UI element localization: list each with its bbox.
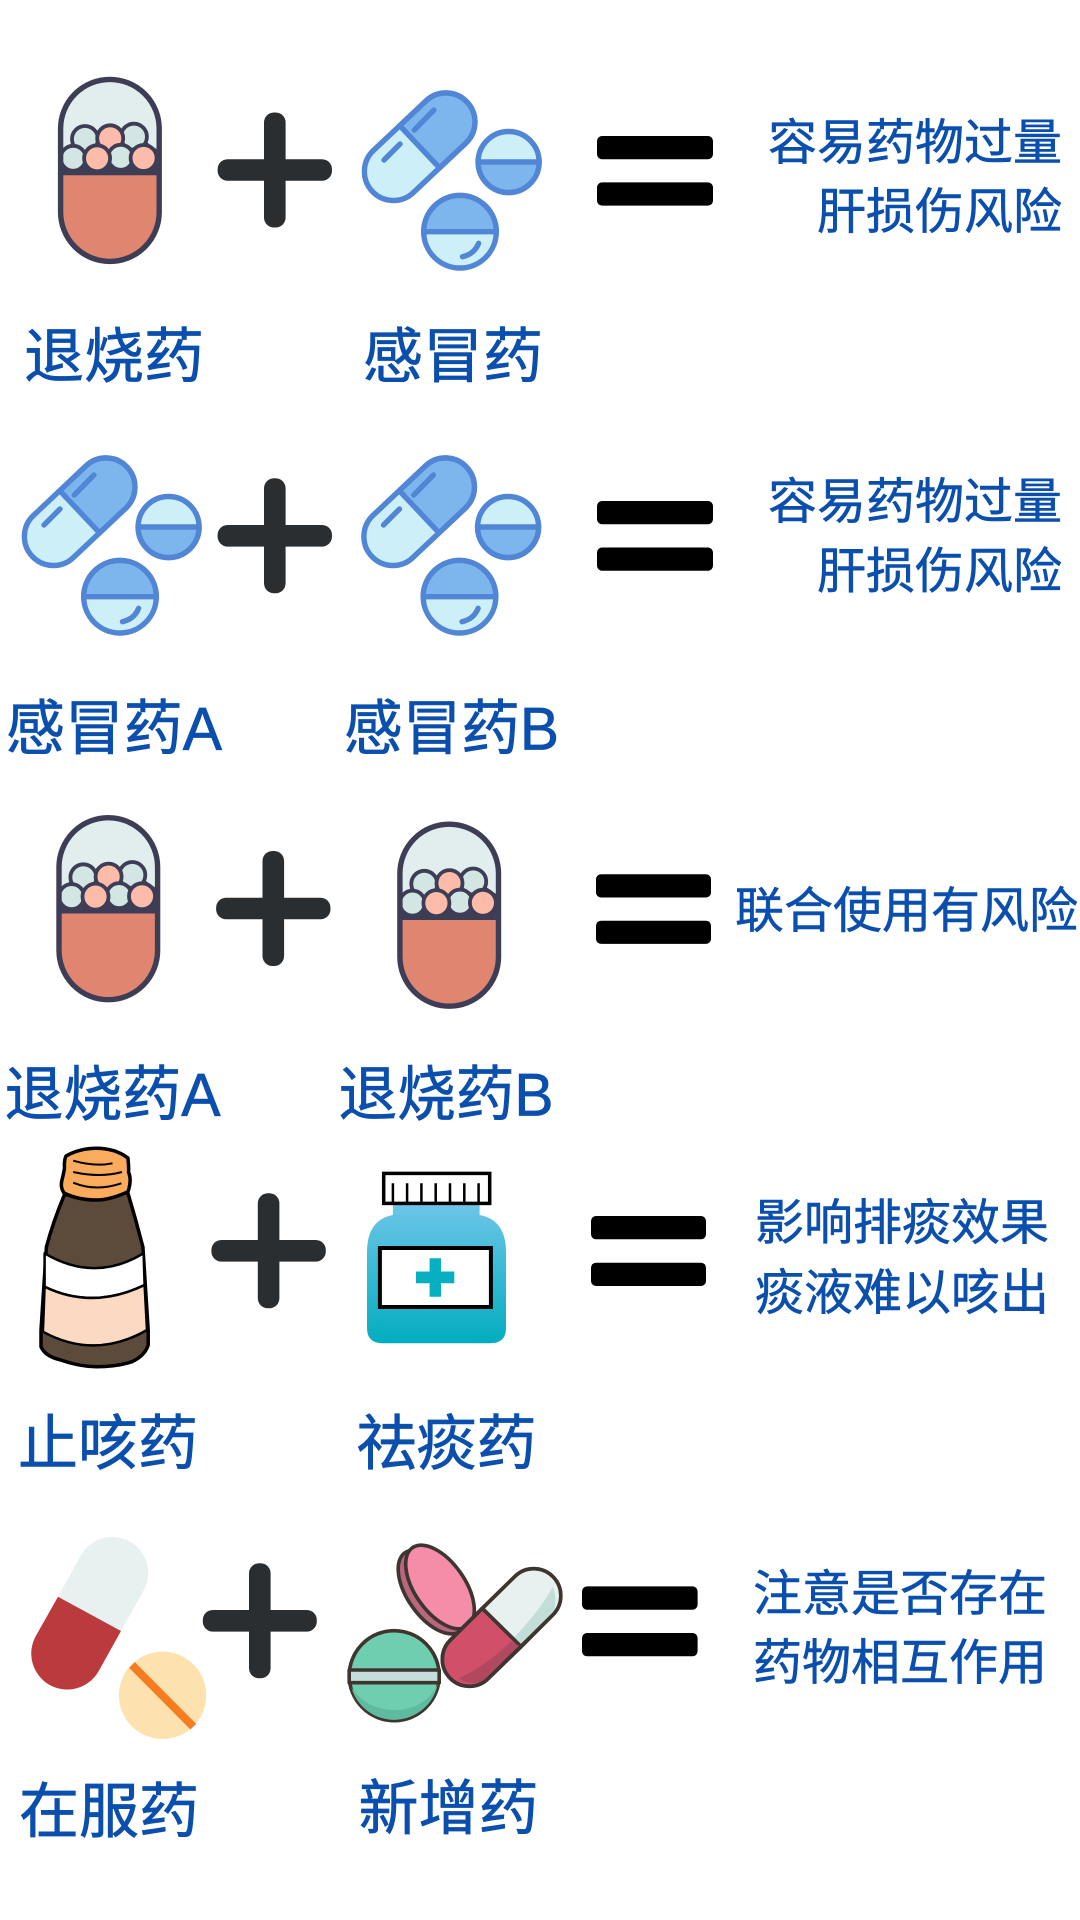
icon: plus: [218, 478, 332, 593]
panel: current medicine plus new medicine: [19, 1533, 1047, 1845]
label: cold medicine B: 感冒药B: [344, 695, 559, 762]
icon: equals: [591, 1216, 706, 1286]
label: cough suppressant: 止咳药: [18, 1410, 198, 1477]
icon: equals: [582, 1586, 698, 1656]
result text: 容易药物过量: [768, 476, 1062, 530]
label: fever medicine: 退烧药: [24, 323, 204, 390]
result text: 肝损伤风险: [817, 186, 1062, 240]
result text: [755, 1197, 1049, 1320]
result text: 药物相互作用: [753, 1636, 1047, 1690]
label: cold medicine: 感冒药: [363, 323, 543, 390]
icon: plus: [203, 1563, 317, 1678]
icon: equals: [596, 874, 711, 944]
label: cold medicine A: 感冒药A: [6, 695, 222, 762]
icon: equals: [597, 501, 713, 571]
icon: blue cold pills: [364, 93, 539, 268]
icon: fever capsule: [61, 79, 159, 261]
result text: 注意是否存在: [753, 1567, 1047, 1621]
result text: 联合使用有风险: [735, 885, 1078, 939]
icon: plus: [211, 1193, 326, 1308]
result text: [753, 1567, 1047, 1690]
icon: fever capsule B: [400, 824, 498, 1006]
label: expectorant: 祛痰药: [356, 1410, 536, 1477]
panel: cold medicine A plus cold medicine B: [6, 458, 1062, 762]
icon: fever capsule A: [59, 818, 158, 1000]
result text: 容易药物过量: [768, 116, 1062, 170]
icon: plus: [216, 851, 330, 966]
result text: [768, 476, 1062, 599]
label: fever medicine A: 退烧药A: [4, 1061, 220, 1128]
panel: fever medicine A plus fever medicine B: [4, 818, 1078, 1128]
icon: red capsule and yellow tablet: [31, 1537, 206, 1739]
icon: blue cold pills B: [364, 458, 539, 633]
icon: blue cold pills A: [24, 458, 199, 633]
icon: plus: [218, 112, 332, 228]
result text: [768, 116, 1062, 240]
icon: equals: [597, 136, 713, 206]
result text: 痰液难以咳出: [755, 1266, 1049, 1320]
panel: fever medicine plus cold medicine: [24, 79, 1062, 390]
label: current medicine: 在服药: [19, 1778, 199, 1845]
icon: pink, green and red new pills: [349, 1533, 561, 1721]
label: fever medicine B: 退烧药B: [338, 1061, 554, 1128]
result text: 影响排痰效果: [755, 1197, 1049, 1251]
panel: cough suppressant plus expectorant: [18, 1148, 1049, 1477]
icon: brown syrup bottle: [41, 1148, 148, 1367]
icon: teal medicine jar: [367, 1173, 506, 1343]
result text: 肝损伤风险: [817, 545, 1062, 599]
label: new medicine: 新增药: [358, 1775, 538, 1842]
